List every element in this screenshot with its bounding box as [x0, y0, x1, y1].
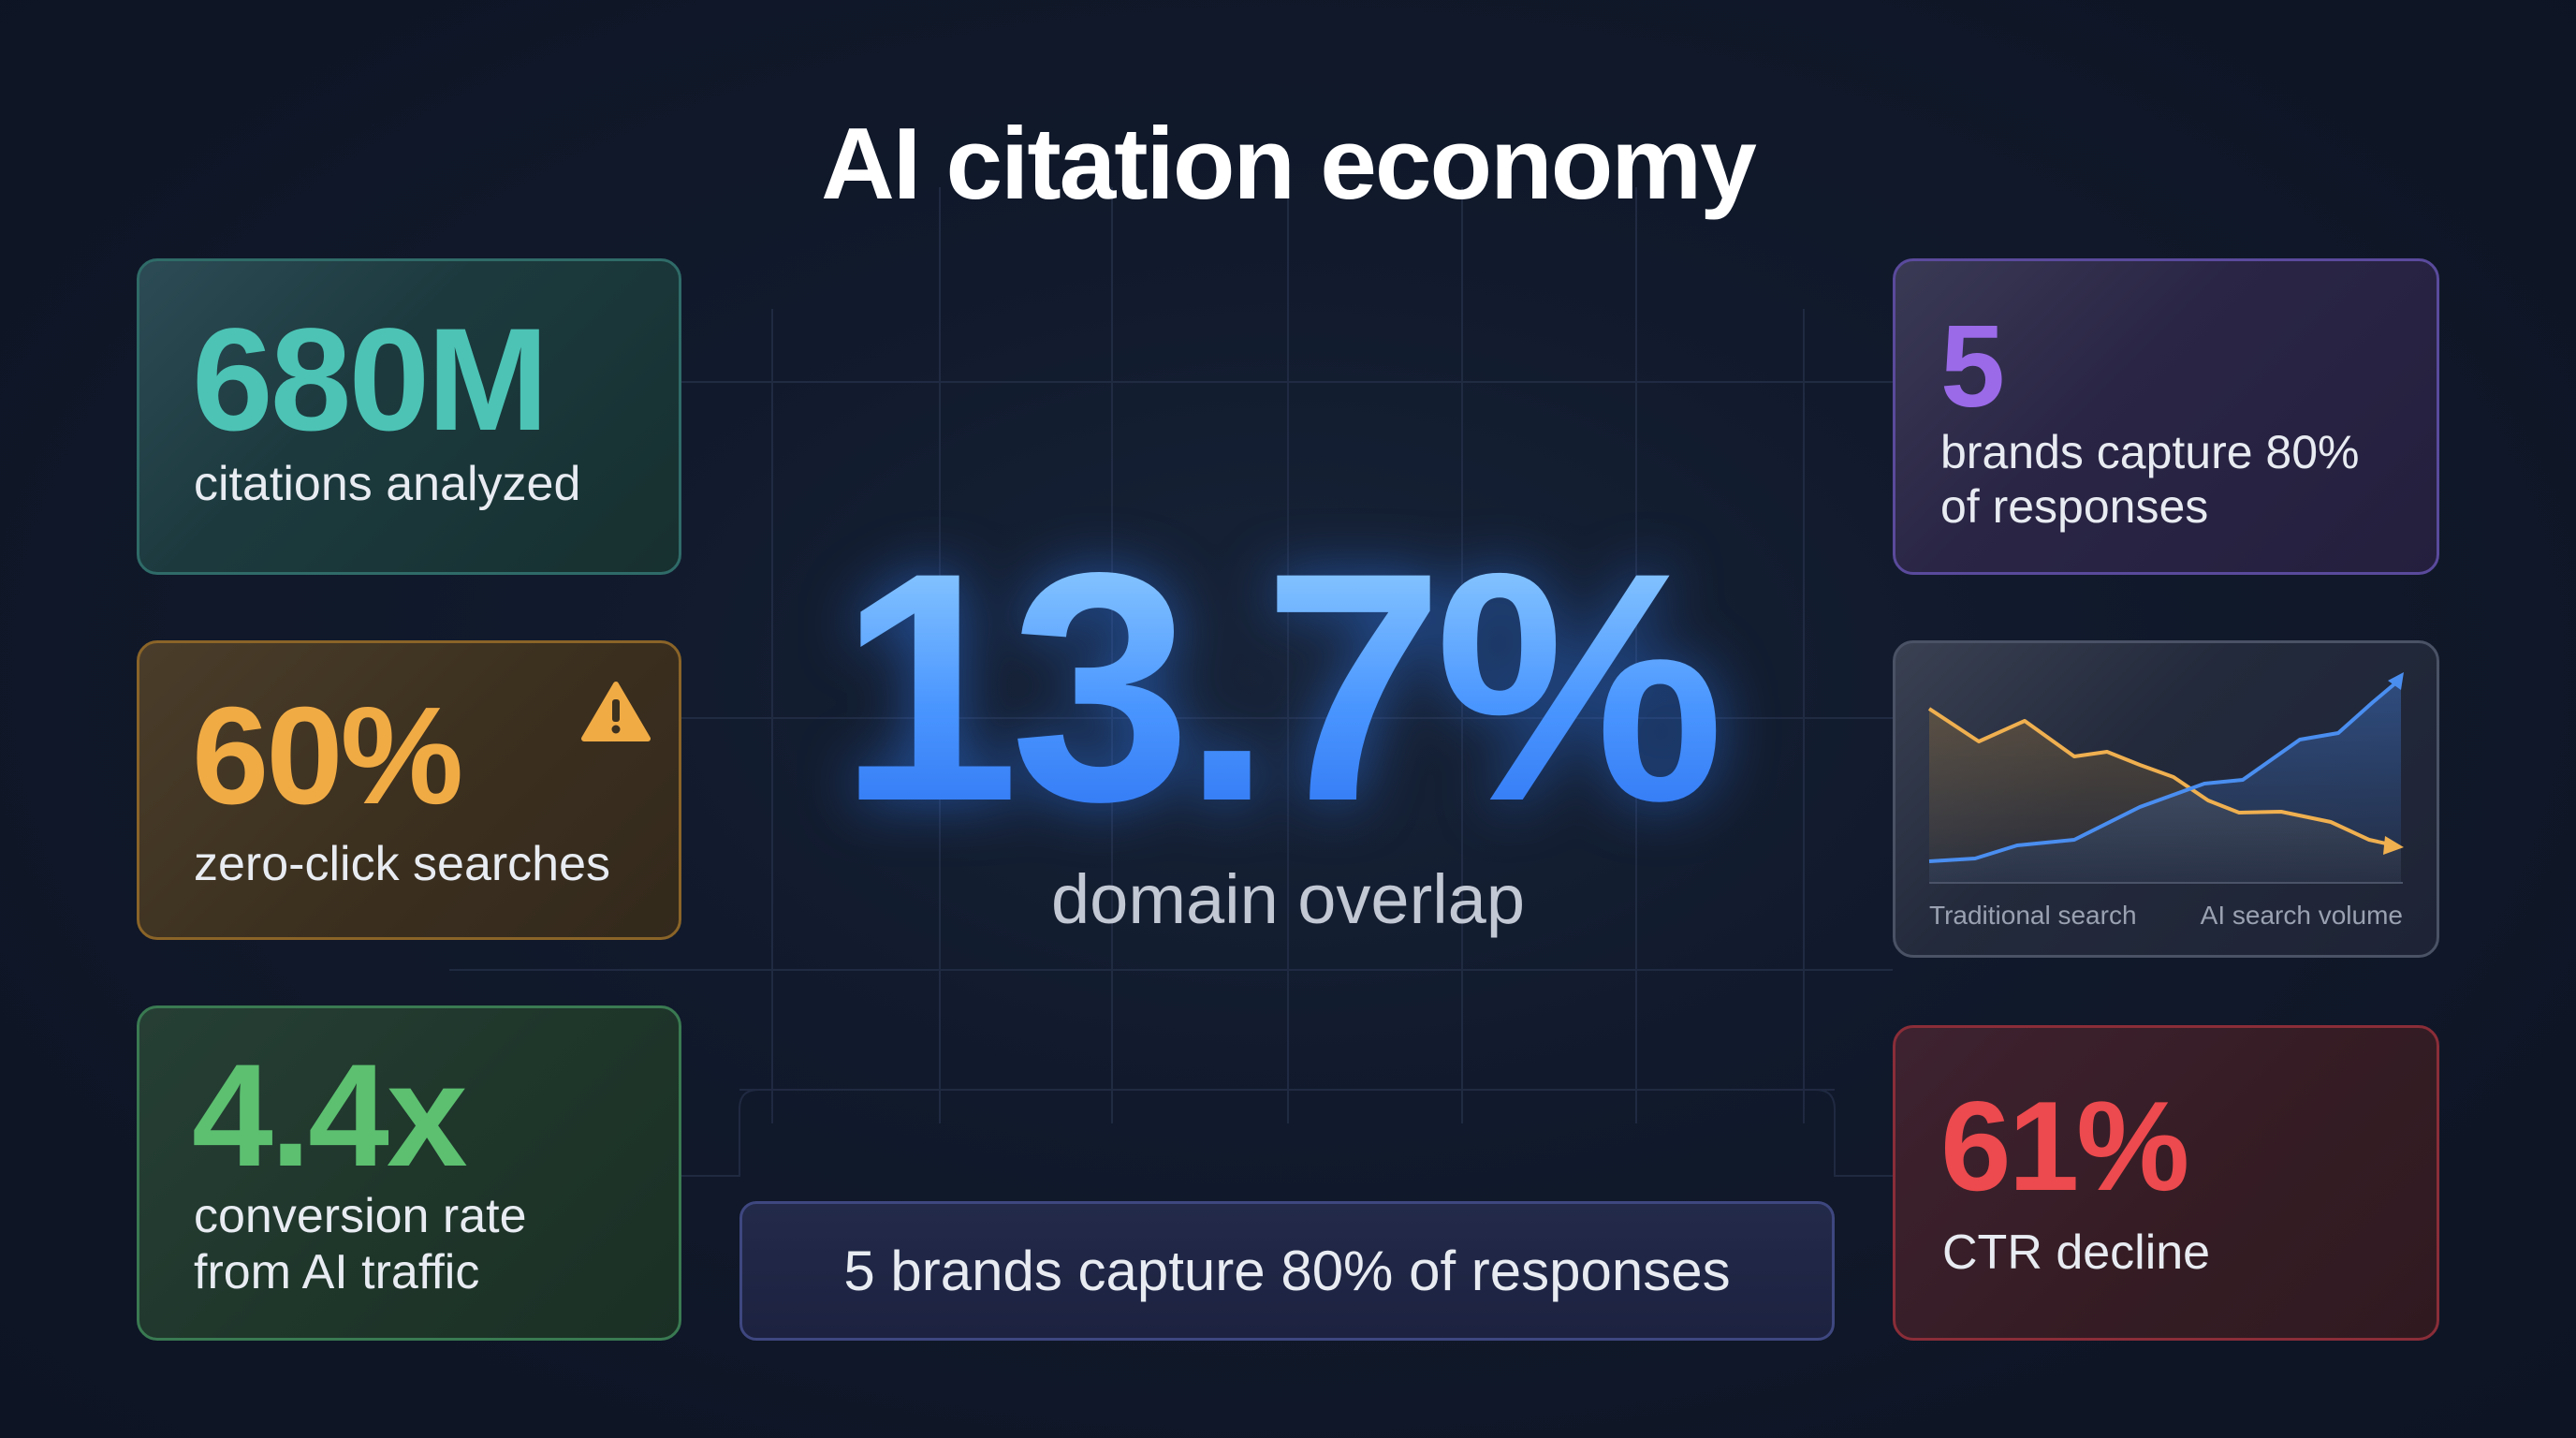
card: chart	[1893, 640, 2439, 958]
label brands: brands capture 80%	[1940, 426, 2360, 478]
stat 61%: 61%	[1940, 1075, 2187, 1217]
stat 4.4x: 4.4x	[192, 1034, 465, 1197]
card: 5 brands	[1893, 258, 2439, 575]
centre stat 13.7%	[0, 509, 2565, 865]
label conversion: conversion rate	[194, 1189, 527, 1243]
label brands	[1940, 426, 2360, 533]
chart: traditional vs AI search	[1928, 672, 2404, 930]
banner	[739, 1201, 1835, 1341]
stat 60%: 60%	[192, 679, 461, 833]
stat 5: 5	[1940, 302, 2002, 432]
icon: warning	[581, 682, 651, 741]
label conversion: from AI traffic	[194, 1245, 479, 1299]
chart: traditional vs AI search: Traditional search	[1929, 901, 2137, 930]
card: 60%	[137, 640, 681, 940]
chart: traditional vs AI search: AI search volume	[2201, 901, 2403, 930]
label conversion	[194, 1189, 527, 1299]
card: 680M	[137, 258, 681, 575]
centre label domain overlap: domain overlap	[1051, 860, 1525, 938]
label zero-click: zero-click searches	[194, 837, 610, 891]
title: AI citation economy	[821, 107, 1755, 221]
label CTR: CTR decline	[1942, 1225, 2210, 1280]
banner: 5 brands capture 80% of responses	[843, 1240, 1731, 1302]
label citations: citations analyzed	[194, 457, 580, 511]
card: 4.4x	[137, 1005, 681, 1341]
card: 61%	[1893, 1025, 2439, 1341]
stat 680M: 680M	[192, 299, 546, 462]
centre stat 13.7%: 13.7%	[839, 505, 1715, 869]
label brands: of responses	[1940, 480, 2208, 533]
